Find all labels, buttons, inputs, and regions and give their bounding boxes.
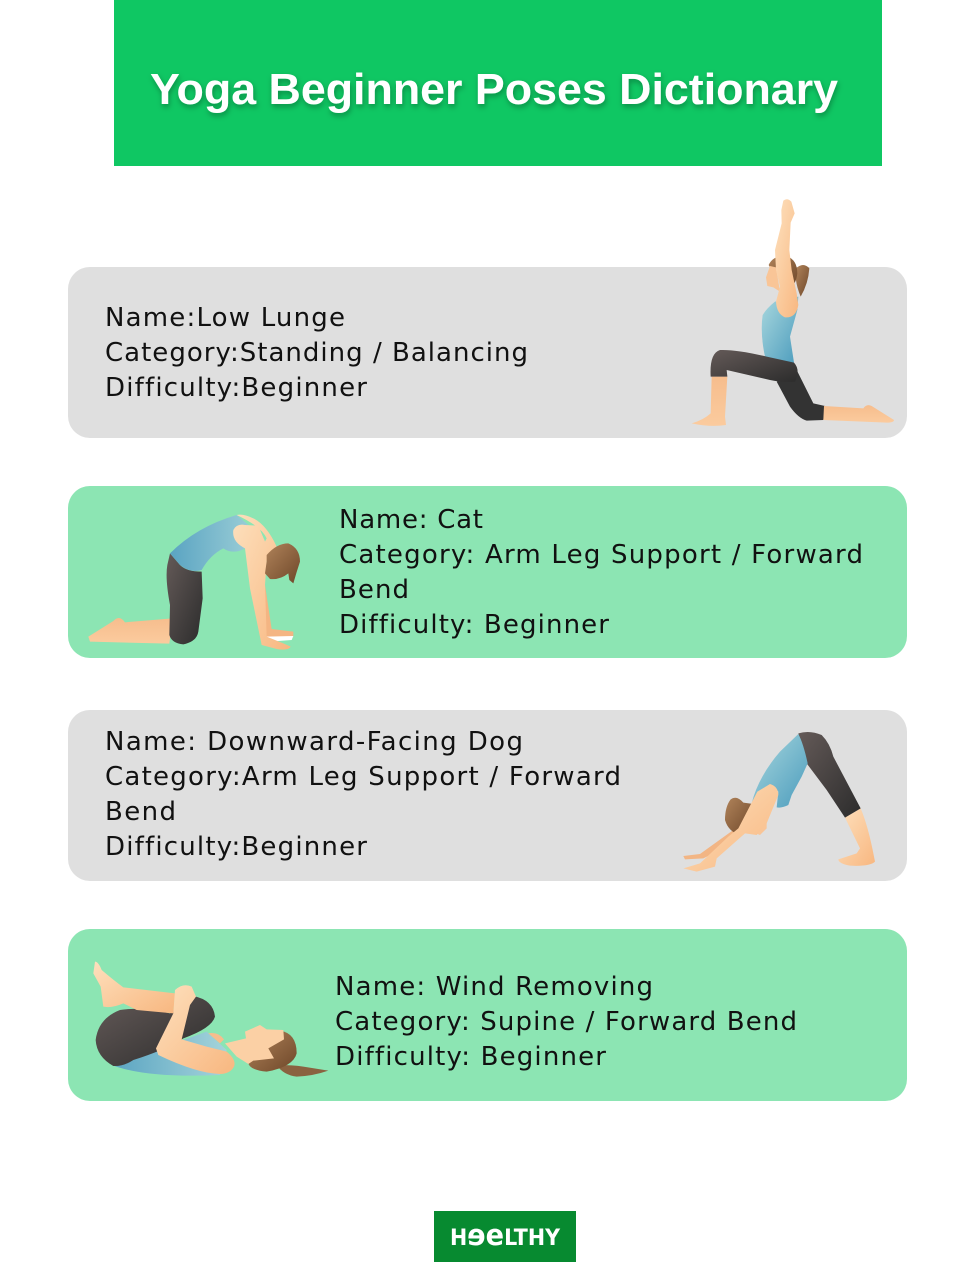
panel: Wind Removing [68,929,907,1101]
text: Low Lunge details: Difficulty:Beginner [105,373,367,403]
text: Wind Removing details [335,972,797,1072]
text: Downward-Facing Dog details: Difficulty:Beginner [105,832,367,862]
text: Cat details: Category: Arm Leg Support / Forward [339,540,863,570]
icon: wind removing pose figure [93,962,328,1077]
icon: cat pose figure [88,515,300,650]
text: Downward-Facing Dog details: Name: Downward-Facing Dog [105,727,523,757]
text: Downward-Facing Dog details: Category:Arm Leg Support / Forward [105,762,621,792]
text: Wind Removing details: Difficulty: Beginner [335,1042,606,1072]
panel: Downward-Facing Dog [68,710,907,881]
icon: low lunge pose figure [692,199,894,426]
text: Cat details [339,505,863,640]
text: Cat details: Name: Cat [339,505,483,535]
title: Yoga Beginner Poses Dictionary [150,65,839,114]
panel: Low Lunge [68,199,907,438]
panel: Cat [68,486,907,658]
footer logo [434,1211,576,1262]
footer logo: HɘeLTHY [450,1218,561,1252]
text: Downward-Facing Dog details: Bend [105,797,176,827]
text: Wind Removing details: Category: Supine / Forward Bend [335,1007,797,1037]
text: Wind Removing details: Name: Wind Removing [335,972,653,1002]
title banner [114,0,882,166]
text: Cat details: Difficulty: Beginner [339,610,609,640]
text: Cat details: Bend [339,575,409,605]
text: Downward-Facing Dog details [105,727,621,862]
icon: downward-facing dog pose figure [683,732,875,872]
text: Low Lunge details: Category:Standing / Balancing [105,338,528,368]
text: Low Lunge details: Name:Low Lunge [105,303,345,333]
text: Low Lunge details [105,303,528,403]
